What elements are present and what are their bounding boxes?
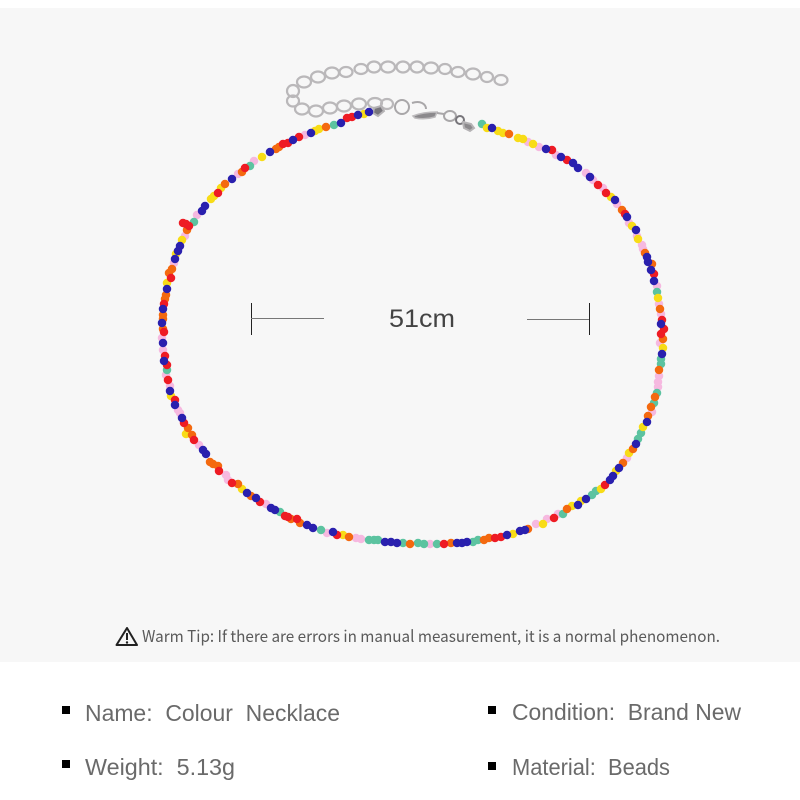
measurement: left bracket [251,303,324,335]
blue beads [162,112,662,543]
red beads [164,117,664,544]
measurement: label: 51cm [389,305,455,333]
spec: material: Material: Beads [512,754,670,780]
beaded necklace [162,112,664,544]
warm tip text: Warm Tip: If there are errors in manual measurement, it is a normal phenomenon. [142,623,720,647]
orange beads [163,127,663,544]
yellow beads [167,114,663,535]
spec: weight: Weight: 5.13g [85,754,235,780]
panel: product specifications [62,699,741,780]
teal beads [167,124,661,544]
clasp [373,100,474,131]
extender chain [287,62,508,116]
pink beads [162,135,661,544]
icon: warning triangle [116,628,137,645]
spec: condition: Condition: Brand New [512,699,741,725]
spec: name: Name: Colour Necklace [85,700,340,726]
measurement: right bracket [527,303,590,335]
